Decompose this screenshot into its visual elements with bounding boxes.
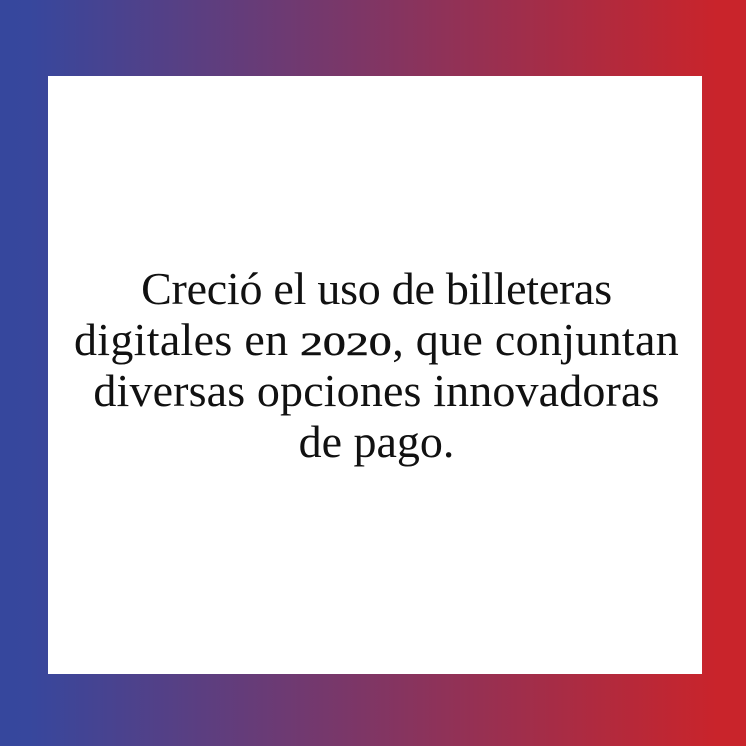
main statement text: [74, 263, 679, 467]
main statement text: digitales en , que conjuntan: [74, 314, 679, 365]
main statement text: de pago.: [299, 416, 454, 467]
panel: white card: [48, 76, 702, 674]
main statement text: Creció el uso de billeteras: [141, 263, 612, 314]
main statement text: diversas opciones innovadoras: [93, 365, 660, 416]
main statement text: 2020: [300, 327, 392, 363]
